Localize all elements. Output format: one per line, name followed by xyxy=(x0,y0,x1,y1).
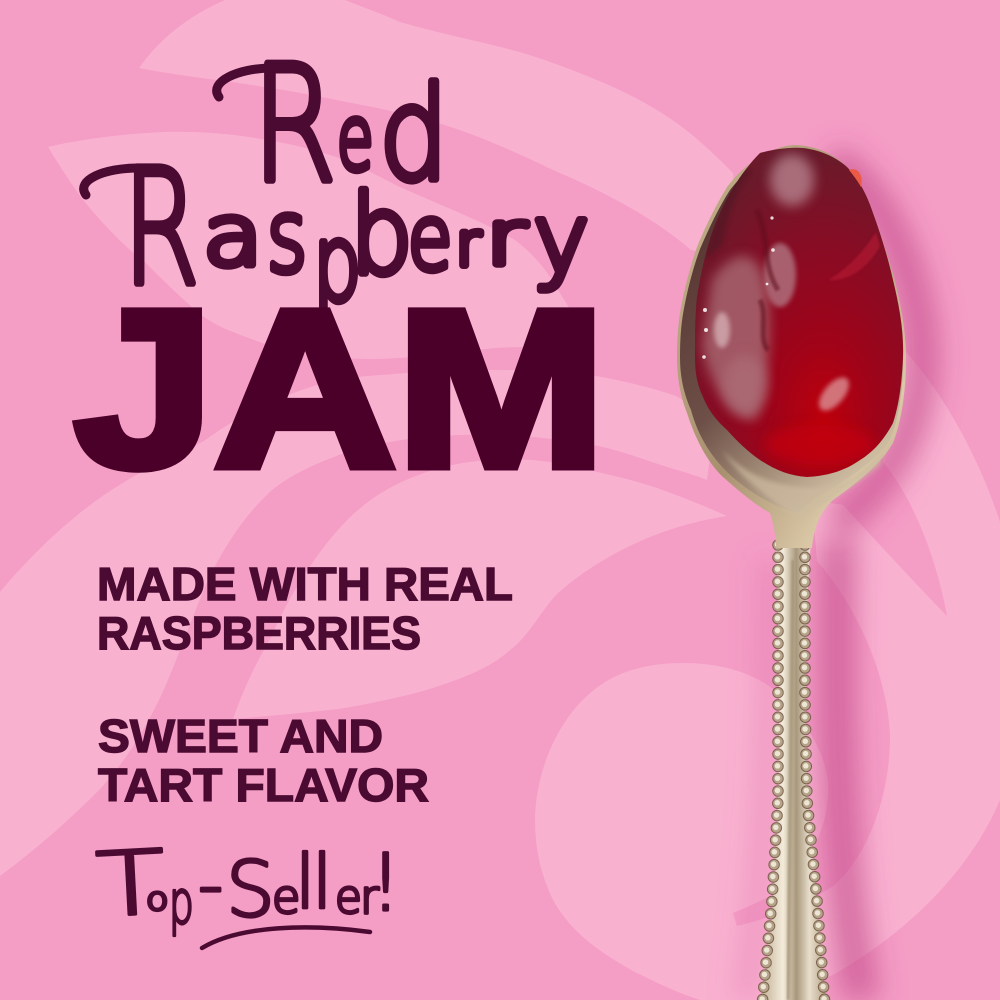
handwritten callout: top-seller: e xyxy=(335,870,362,924)
title: Raspberry xyxy=(123,136,589,325)
handwritten callout: top-seller xyxy=(94,831,401,948)
handwritten callout: top-seller: - xyxy=(198,844,223,926)
spoon photograph xyxy=(677,145,922,1000)
title: Red xyxy=(252,31,449,218)
spoon bowl xyxy=(677,145,906,548)
text block: sweet and tart flavor: TART FLAVOR xyxy=(98,759,429,811)
text block: made with real raspberries xyxy=(97,558,513,659)
middle leaf xyxy=(48,132,592,359)
title: Raspberry: e xyxy=(408,186,452,291)
title: Raspberry: R xyxy=(123,136,199,321)
beads xyxy=(762,544,825,1000)
jam drip xyxy=(849,169,862,187)
handwritten callout: top-seller: ! xyxy=(370,839,401,929)
handwritten callout: top-seller: p xyxy=(169,867,194,937)
title: Raspberry: a xyxy=(203,186,263,285)
title: Raspberry: y xyxy=(533,185,589,295)
title: Raspberry: b xyxy=(350,171,413,299)
handwritten callout: top-seller: l xyxy=(312,840,333,926)
text block: sweet and tart flavor: SWEET AND xyxy=(98,710,383,762)
handwritten callout: top-seller: l xyxy=(295,840,316,926)
jam blob xyxy=(695,148,903,477)
left swoosh band xyxy=(0,370,715,876)
handwritten callout: top-seller: S xyxy=(226,846,275,935)
top band xyxy=(139,0,740,260)
handwritten callout: top-seller: e xyxy=(272,870,300,924)
handwritten callout: top-seller: T xyxy=(94,831,168,937)
title: Raspberry: r xyxy=(456,210,481,280)
title: Red: d xyxy=(379,60,449,210)
spoon handle xyxy=(760,530,826,1000)
bowl highlight xyxy=(722,440,888,520)
spoon shadow xyxy=(745,160,922,1000)
title flourishes xyxy=(84,68,272,195)
handwritten callout: top-seller: r xyxy=(360,870,379,924)
title: Red: R xyxy=(252,31,336,218)
lower leaf xyxy=(233,459,727,719)
title: Raspberry: s xyxy=(267,179,307,296)
title: JAM: JAM xyxy=(74,264,606,514)
text block: made with real raspberries: RASPBERRIES xyxy=(97,607,421,659)
title: Raspberry: r xyxy=(486,194,526,282)
title: Red: e xyxy=(337,85,374,190)
bowl inner xyxy=(680,148,903,513)
specks xyxy=(702,216,775,359)
underline stroke xyxy=(202,927,370,948)
text block: made with real raspberries: MADE WITH REAL xyxy=(97,558,513,610)
jam highlights xyxy=(770,154,814,206)
handwritten callout: top-seller: o xyxy=(146,881,169,918)
title: Raspberry: p xyxy=(313,201,361,325)
text block: sweet and tart flavor xyxy=(98,710,429,811)
lower right blob and band xyxy=(535,330,1000,1000)
